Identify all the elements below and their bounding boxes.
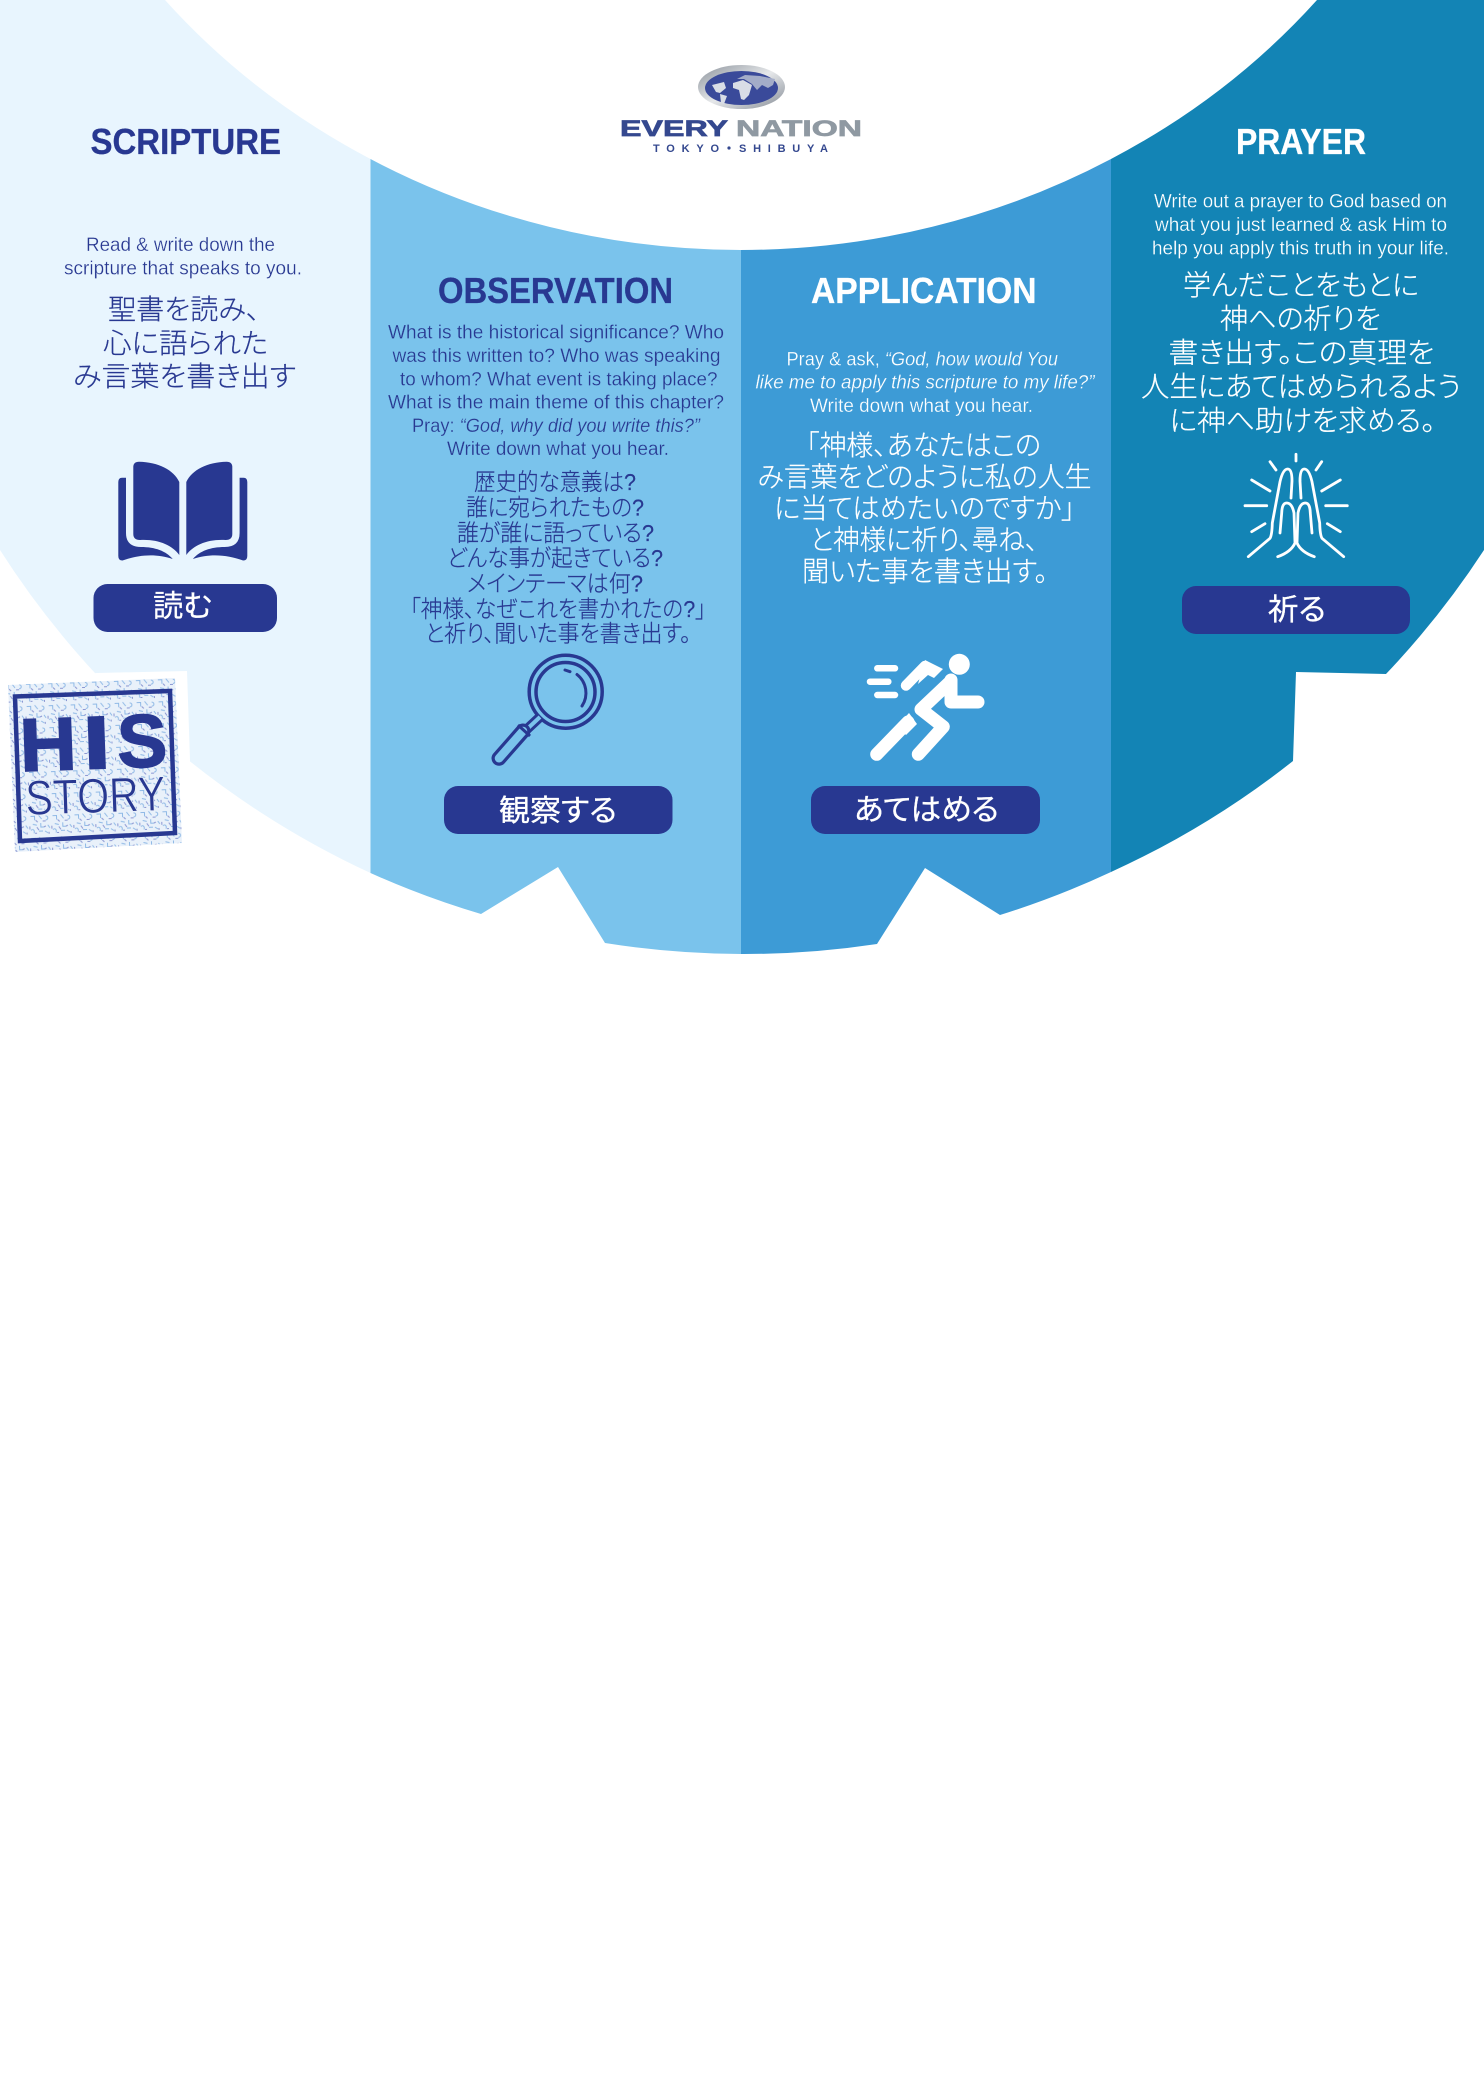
heading: application: APPLICATION (811, 270, 1036, 311)
text: application prompt (756, 348, 1096, 417)
text: EVERY NATION: NATION (736, 116, 862, 141)
text: scripture Japanese: 心に語られた (103, 328, 268, 359)
heading: prayer: PRAYER (1236, 121, 1366, 162)
text: prayer Japanese (1141, 270, 1461, 438)
text: observation Japanese: 誰が誰に語っている? (457, 520, 654, 546)
panel: application (741, 159, 1111, 954)
text: observation questions: What is the main theme of this chapter? (388, 392, 724, 414)
text: scripture description (64, 234, 302, 280)
button: apply: あてはめる (854, 794, 999, 827)
text: prayer Japanese: に神へ助けを求める。 (1170, 406, 1436, 438)
text: observation questions: What is the historical significance? Who (388, 322, 724, 344)
text: observation questions (388, 322, 724, 460)
text: scripture Japanese: み言葉を書き出す (73, 361, 296, 392)
text: observation Japanese: どんな事が起きている? (447, 545, 663, 571)
text: prayer description: help you apply this truth in your life. (1152, 238, 1449, 260)
text: observation Japanese: と祈り、聞いた事を書き出す。 (425, 620, 691, 646)
button: observe (444, 786, 672, 834)
text: prayer Japanese: 神への祈りを (1220, 304, 1381, 336)
text: STORY: STORY (24, 767, 166, 826)
text: observation Japanese: 「神様、なぜこれを書かれたの?」 (410, 596, 706, 622)
text: observation Japanese (410, 469, 706, 646)
text: EVERY NATION: EVERY (620, 116, 728, 141)
button: read: 読む (153, 590, 212, 624)
text: HIS: I (81, 700, 112, 785)
text: HIS: H (18, 701, 78, 787)
panel: scripture (0, 0, 370, 873)
text: HIS (18, 698, 168, 787)
text: application prompt: Pray & ask, “God, how would You (786, 348, 1058, 370)
icon: globe (698, 65, 785, 109)
button: pray (1182, 586, 1410, 634)
text: application Japanese: に当てはめたいのですか」 (774, 493, 1075, 524)
text: application Japanese (758, 430, 1092, 587)
button: observe: 観察する (499, 795, 617, 828)
icon: runner (870, 654, 978, 754)
text: observation questions: was this written to? Who was speaking (392, 345, 720, 367)
logo: Every Nation Tokyo Shibuya (620, 65, 862, 155)
stamp: His Story (2, 671, 190, 856)
text: HIS: S (116, 698, 168, 784)
text: scripture Japanese: 聖書を読み、 (108, 294, 260, 325)
text: application prompt: Write down what you hear. (810, 395, 1033, 417)
text: observation Japanese: メインテーマは何? (467, 570, 643, 596)
text: prayer description (1152, 190, 1449, 260)
text: observation questions: to whom? What event is taking place? (400, 368, 718, 390)
text: scripture description: scripture that speaks to you. (64, 258, 302, 280)
heading: observation: OBSERVATION (438, 270, 673, 311)
text: prayer description: what you just learned & ask Him to (1154, 214, 1447, 236)
text: application Japanese: と神様に祈り、尋ね、 (810, 524, 1038, 556)
text: EVERY NATION (620, 116, 862, 141)
text: application prompt: like me to apply this scripture to my life?” (756, 372, 1096, 394)
text: prayer Japanese: 書き出す。この真理を (1168, 338, 1434, 370)
button: apply (811, 786, 1040, 834)
text: observation questions: Write down what you hear. (447, 438, 669, 460)
text: prayer Japanese: 人生にあてはめられるよう (1141, 372, 1461, 404)
panel: observation (370, 159, 741, 954)
text: scripture Japanese (73, 294, 296, 392)
button: pray: 祈る (1268, 594, 1326, 627)
text: Tokyo Shibuya: TOKYO (653, 143, 719, 155)
panel: prayer (1111, 0, 1484, 872)
text: scripture description: Read & write down the (86, 234, 275, 256)
text: application Japanese: み言葉をどのように私の人生 (758, 462, 1092, 492)
text: observation Japanese: 誰に宛られたもの? (466, 494, 644, 520)
text: observation Japanese: 歴史的な意義は? (474, 469, 636, 495)
icon: praying hands (1245, 454, 1347, 557)
text: Tokyo Shibuya (653, 143, 828, 155)
text: observation questions: Pray: “God, why did you write this?” (412, 415, 701, 437)
icon: open book (118, 462, 247, 560)
text: prayer description: Write out a prayer to God based on (1154, 190, 1447, 212)
text: application Japanese: 「神様、あなたはこの (806, 430, 1041, 461)
heading: scripture: SCRIPTURE (90, 121, 281, 162)
icon: magnifying glass (499, 655, 602, 758)
text: Tokyo Shibuya: SHIBUYA (739, 143, 828, 155)
text: application Japanese: 聞いた事を書き出す。 (802, 556, 1048, 587)
button: read (94, 584, 277, 632)
text: prayer Japanese: 学んだことをもとに (1183, 270, 1419, 302)
